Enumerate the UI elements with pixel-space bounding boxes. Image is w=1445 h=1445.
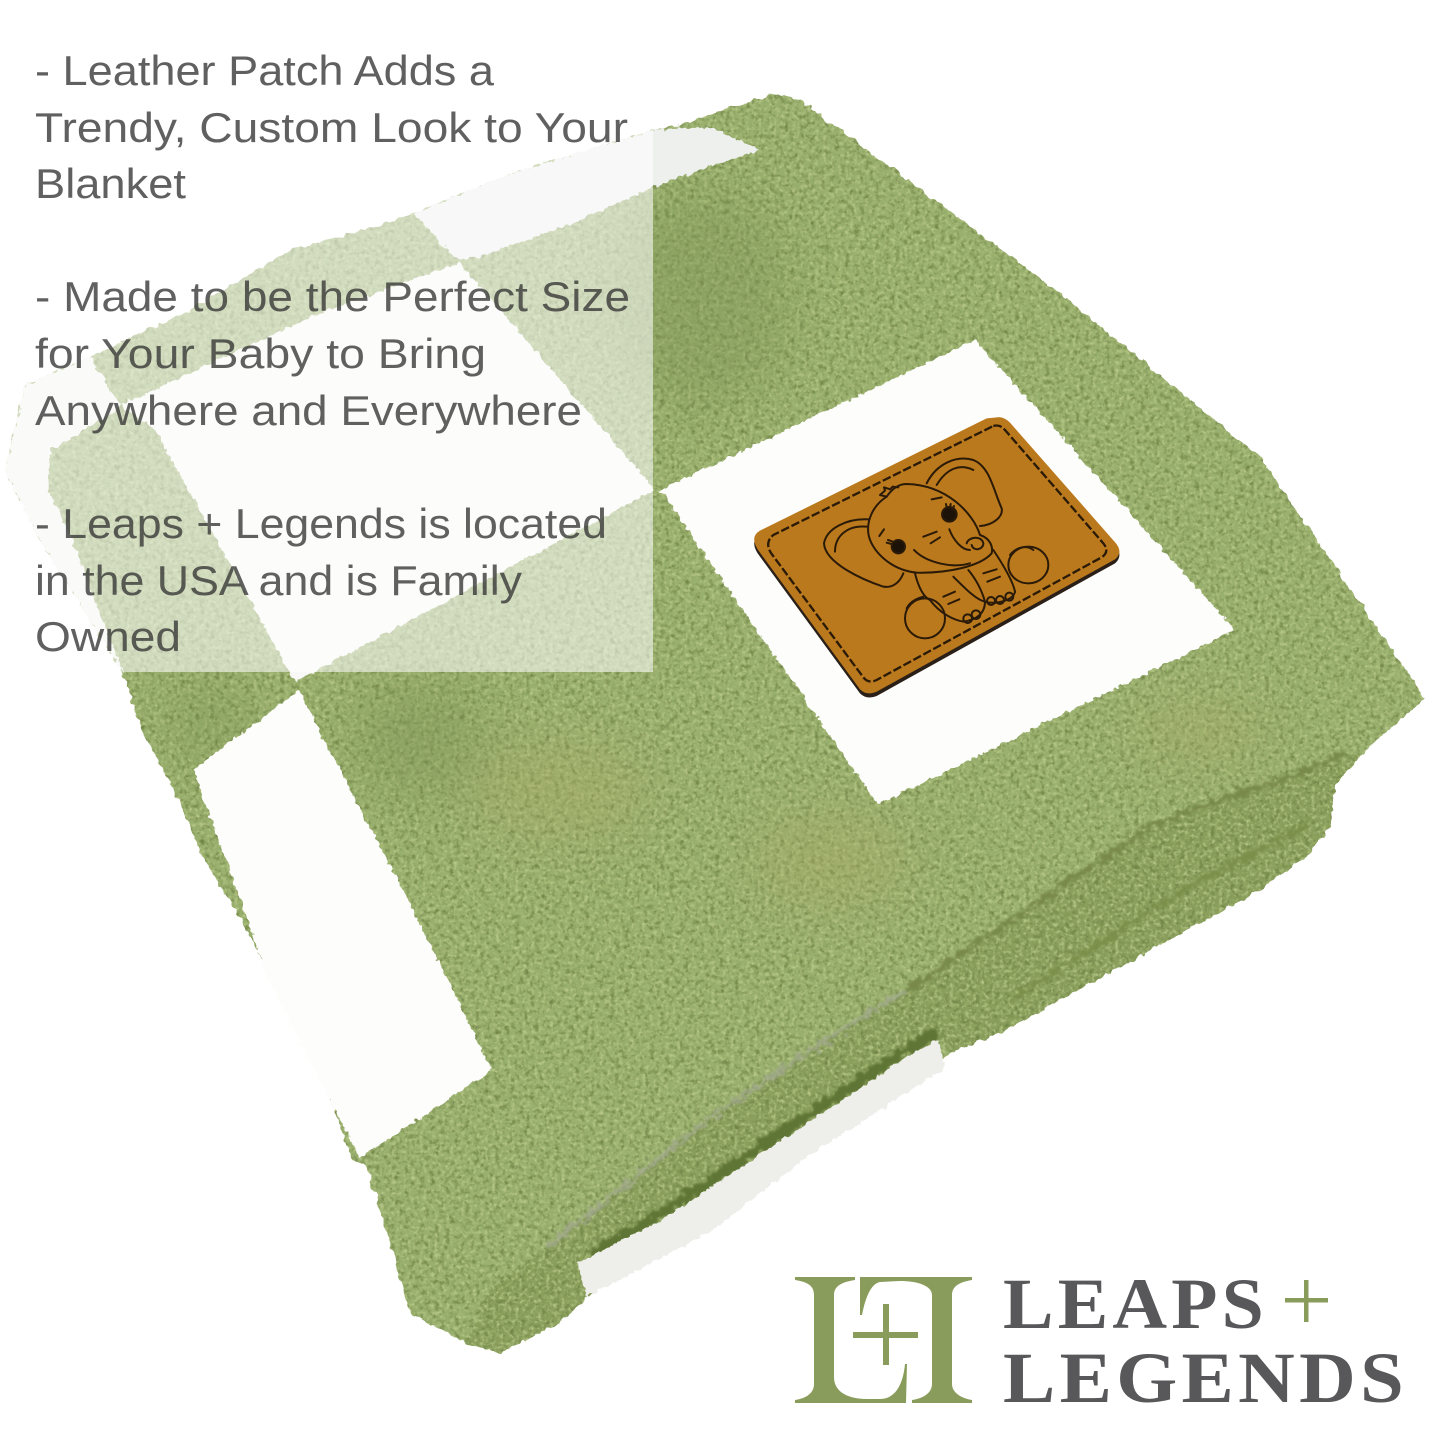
feature: perfect size bbox=[35, 273, 630, 434]
feature: perfect size: Anywhere and Everywhere bbox=[35, 387, 582, 434]
white checker squares bbox=[5, 127, 1235, 1297]
patch stitching bbox=[768, 425, 1106, 681]
logo mark bbox=[795, 1277, 972, 1403]
white rectangle: lower left bbox=[193, 690, 492, 1158]
feature: perfect size: - Made to be the Perfect Size bbox=[35, 273, 630, 320]
white strip: left edge bbox=[5, 357, 123, 673]
feature: family owned bbox=[35, 500, 607, 660]
logo: Leaps + Legends bbox=[795, 1264, 1408, 1418]
patch leather bbox=[754, 417, 1119, 693]
logo: Leaps + Legends: LEGENDS bbox=[1003, 1338, 1408, 1418]
olive shading patches bbox=[170, 190, 1270, 910]
feature: perfect size: for Your Baby to Bring bbox=[35, 330, 486, 377]
white strip: top fold bbox=[413, 127, 760, 260]
leather patch with elephant bbox=[754, 417, 1119, 697]
feature: family owned: in the USA and is Family bbox=[35, 557, 522, 604]
feature: leather patch: Blanket bbox=[35, 160, 186, 207]
translucent text panel bbox=[0, 0, 653, 672]
fold shadow lines on blanket side bbox=[550, 753, 1343, 1257]
feature: family owned: Owned bbox=[35, 613, 181, 660]
logo wordmark: LEAPS bbox=[1003, 1264, 1268, 1344]
feature text bbox=[35, 47, 630, 660]
white square: patch background bbox=[660, 340, 1235, 805]
feature: family owned: - Leaps + Legends is located bbox=[35, 500, 607, 547]
elephant engraving bbox=[824, 459, 1048, 638]
feature: leather patch bbox=[35, 47, 628, 207]
white square: under text panel bbox=[120, 263, 655, 682]
feature: leather patch: Trendy, Custom Look to Your bbox=[35, 104, 628, 151]
feature: leather patch: - Leather Patch Adds a bbox=[35, 47, 495, 94]
patch shadow bbox=[754, 420, 1119, 697]
white strip: bottom fold bbox=[577, 1040, 945, 1297]
logo plus bbox=[1285, 1280, 1328, 1322]
